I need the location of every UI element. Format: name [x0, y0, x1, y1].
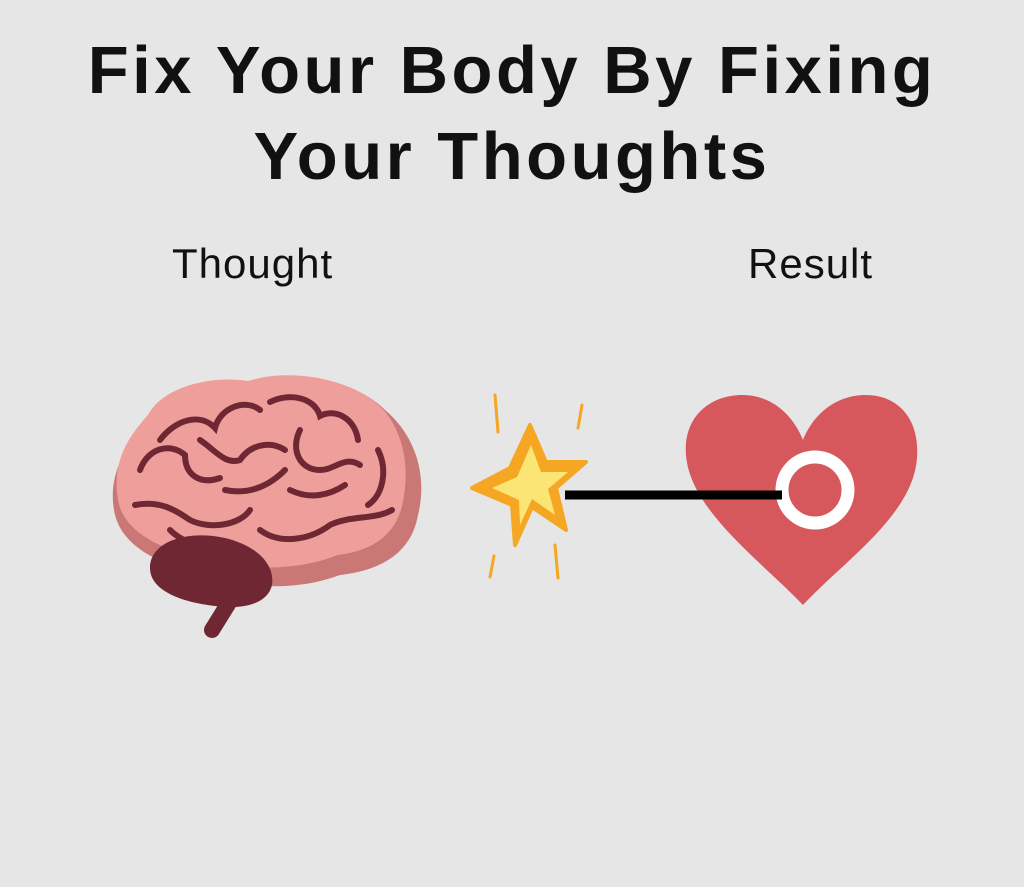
icon: heart with target — [686, 395, 917, 605]
icon: spark star — [472, 395, 586, 578]
title: Your Thoughts — [254, 119, 770, 194]
connector line — [565, 490, 782, 500]
label: thought: Thought — [172, 240, 333, 287]
icon: brain — [113, 375, 421, 630]
label: result: Result — [748, 240, 873, 287]
title: Fix Your Body By Fixing — [88, 33, 936, 108]
title — [88, 33, 936, 194]
